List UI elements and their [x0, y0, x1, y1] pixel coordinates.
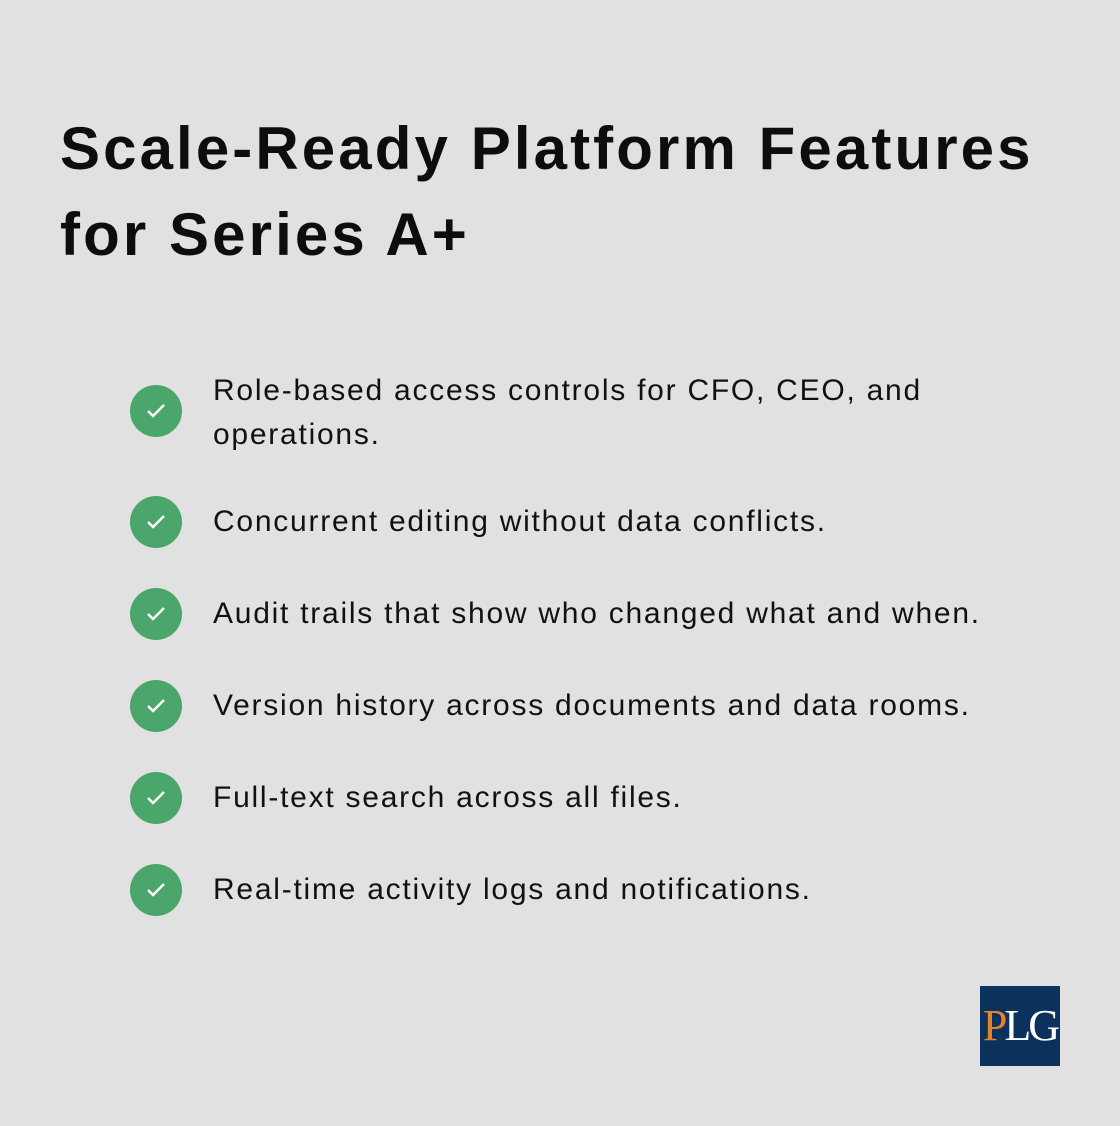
- logo: PLG: [983, 1001, 1057, 1050]
- item 2: Concurrent editing without data conflicts.: [213, 505, 827, 538]
- item 1: Role-based access controls for CFO, CEO, and operations.: [213, 374, 922, 451]
- item 5: [130, 772, 683, 824]
- item 4: [130, 680, 971, 732]
- item 3: [130, 588, 981, 640]
- item 6: [130, 864, 812, 916]
- item 6: Real-time activity logs and notifications.: [213, 873, 812, 906]
- item 4: Version history across documents and data rooms.: [213, 689, 971, 722]
- item 3: Audit trails that show who changed what and when.: [213, 597, 981, 630]
- title: [60, 115, 1034, 268]
- logo: [980, 986, 1060, 1066]
- item 2: [130, 496, 827, 548]
- item 5: Full-text search across all files.: [213, 781, 683, 814]
- title: Scale-Ready Platform Features: [60, 115, 1034, 182]
- title: for Series A+: [60, 201, 470, 268]
